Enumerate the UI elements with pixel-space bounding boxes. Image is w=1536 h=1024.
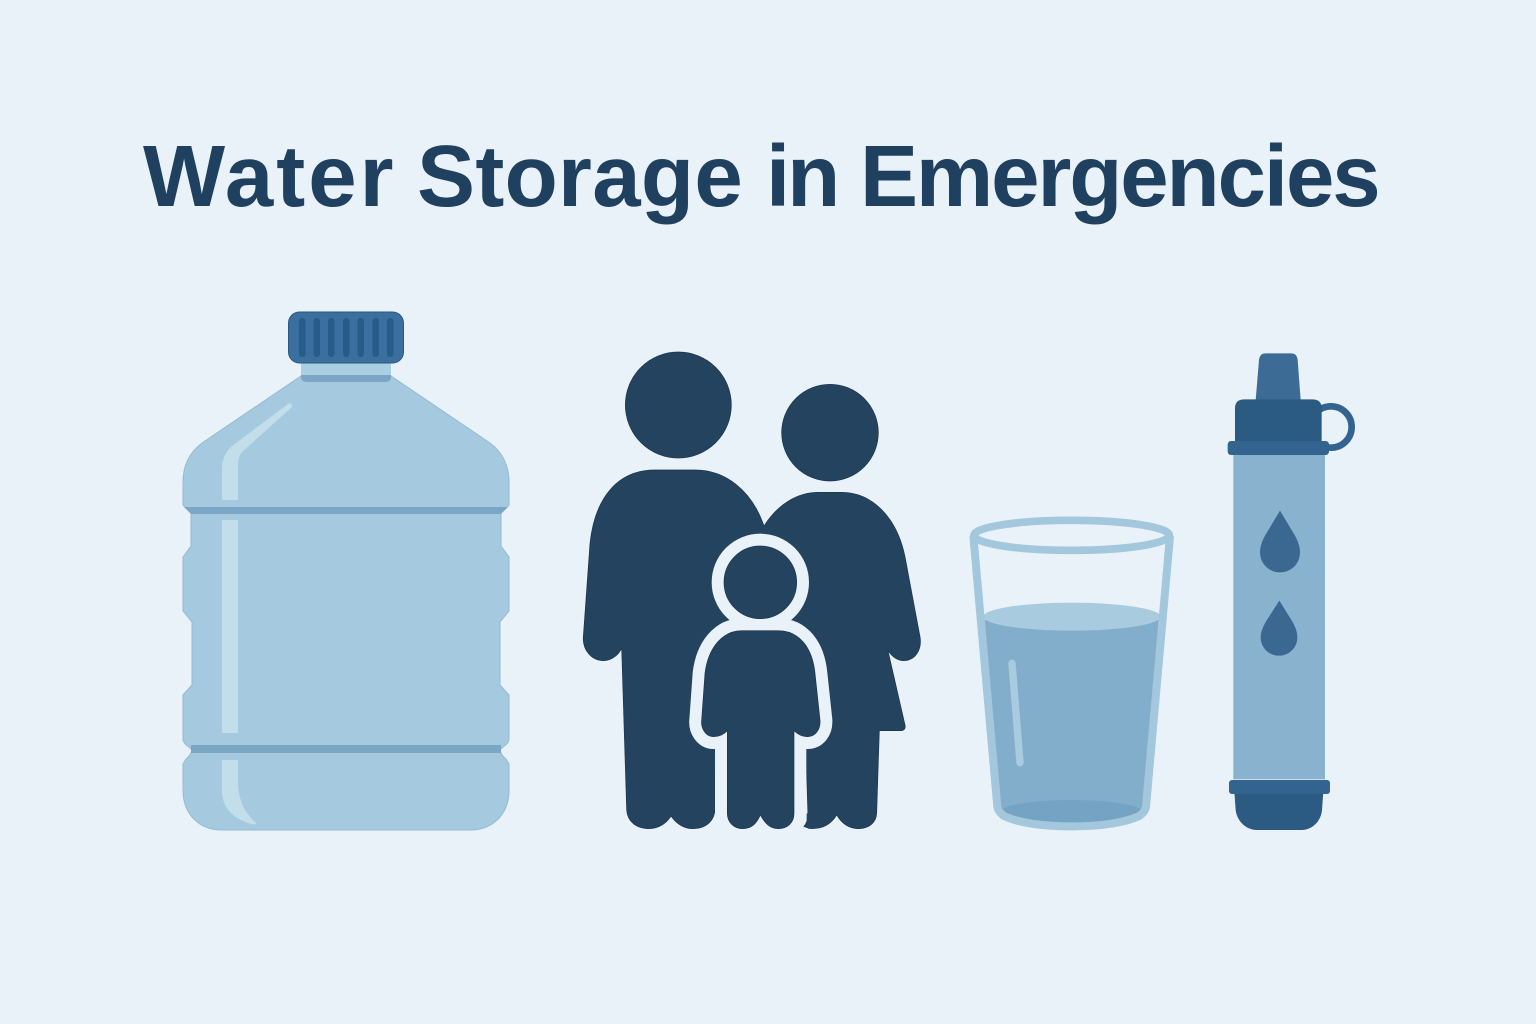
water highlight — [1012, 663, 1020, 763]
child body — [702, 631, 820, 829]
jug body — [183, 376, 509, 830]
icon: water jug — [183, 312, 509, 830]
title: Emergencies — [860, 128, 1379, 225]
child head — [724, 546, 797, 619]
water bottom shade — [1001, 800, 1142, 823]
adult foot tip — [803, 813, 832, 829]
drop two — [1261, 601, 1297, 656]
base highlight — [222, 760, 256, 824]
loop — [1310, 406, 1352, 448]
adult heads — [625, 352, 878, 481]
upper collar — [1228, 441, 1329, 455]
jug cap — [288, 312, 404, 363]
shoulder highlight — [222, 403, 292, 500]
adult bodies — [583, 470, 920, 829]
lower cap — [1234, 792, 1323, 830]
jug neck band — [301, 375, 391, 382]
child outline — [702, 546, 820, 829]
icon: filter straw — [1228, 353, 1352, 830]
nozzle — [1256, 353, 1301, 400]
title: Water — [143, 128, 424, 225]
title: in — [766, 128, 858, 225]
glass walls — [973, 536, 1170, 826]
lower rib — [191, 745, 501, 753]
filter body — [1233, 454, 1325, 779]
upper rib — [184, 507, 508, 514]
upper cap — [1235, 399, 1322, 442]
water surface — [983, 603, 1161, 631]
title: Storage — [417, 128, 768, 225]
water — [983, 620, 1161, 825]
icon: family of three — [583, 352, 920, 829]
jug neck — [301, 362, 391, 382]
drop one — [1260, 511, 1300, 572]
lower collar — [1229, 780, 1330, 794]
cap ribs — [299, 318, 394, 357]
icon: glass of water — [973, 520, 1170, 826]
glass rim — [974, 520, 1169, 550]
middle highlight — [222, 520, 238, 733]
